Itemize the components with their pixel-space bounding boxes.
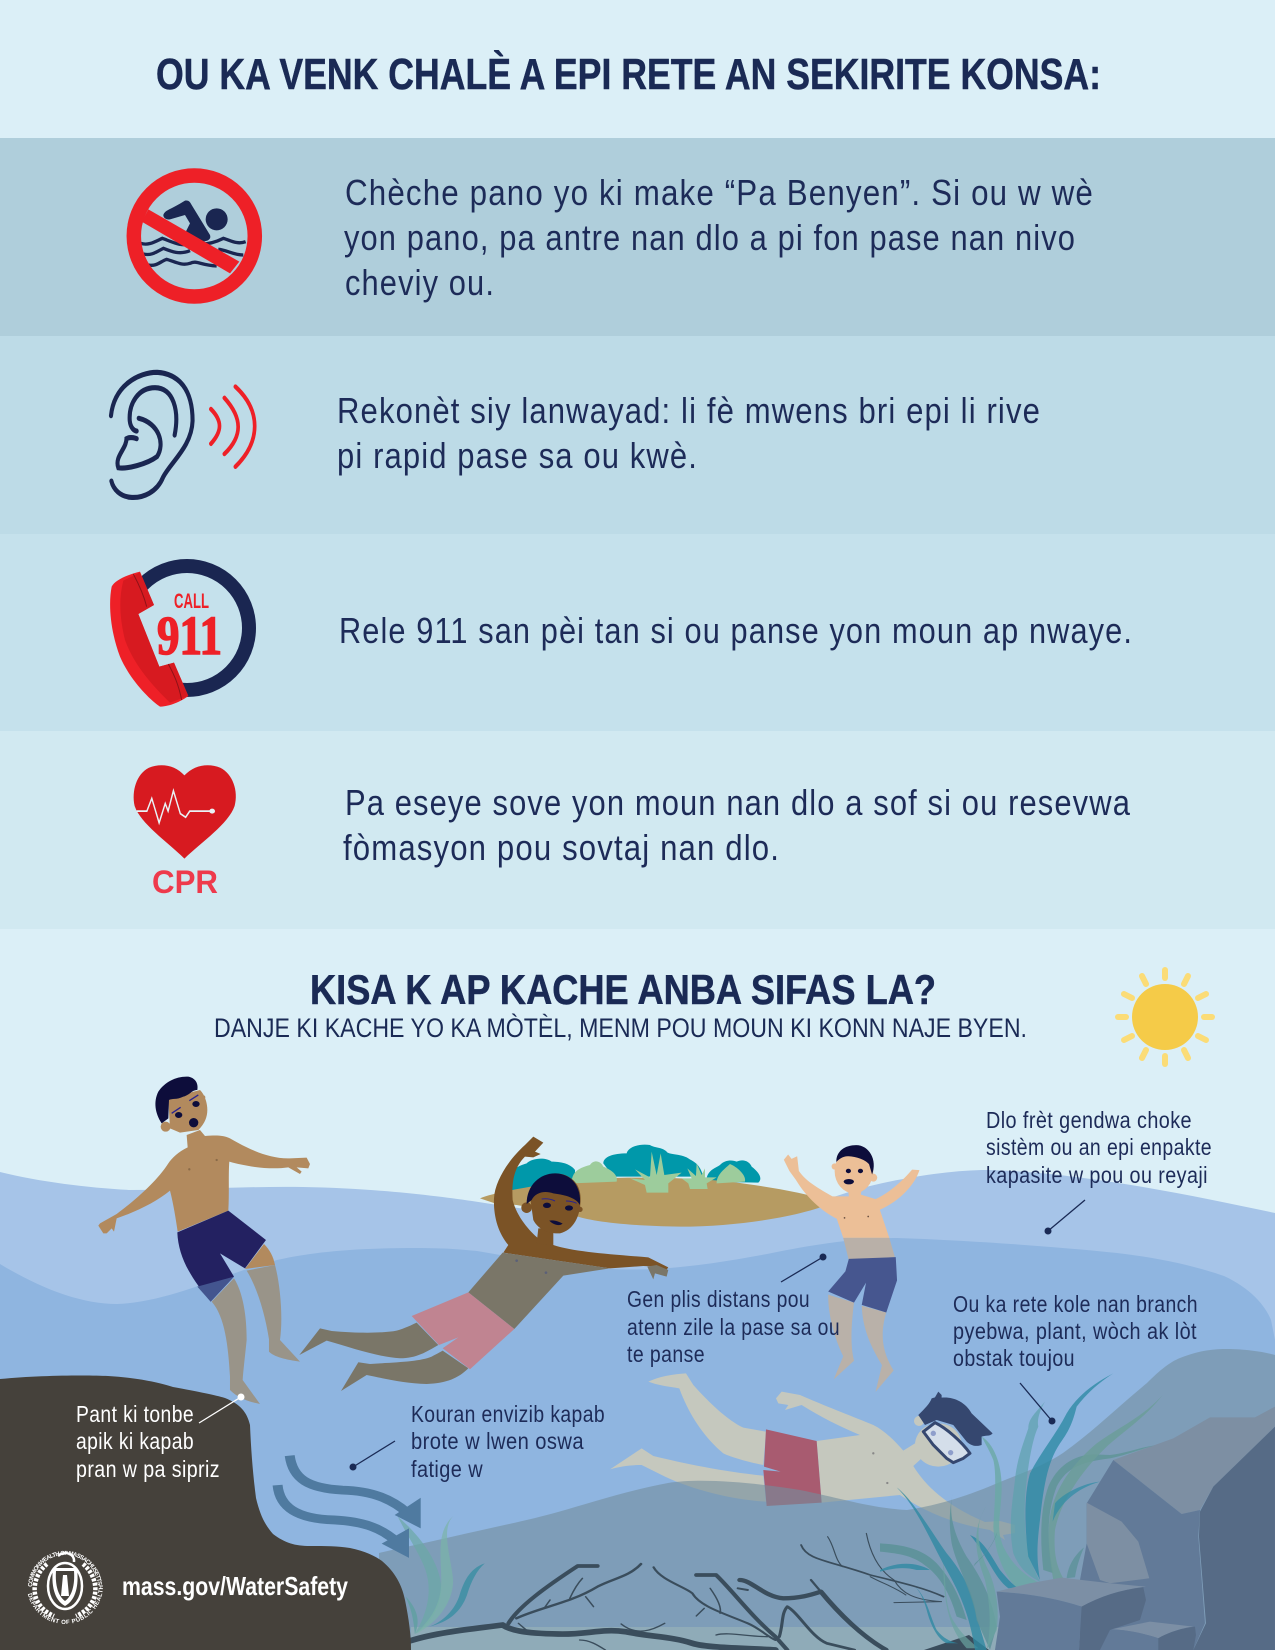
icon: call 911 phone: 911 bbox=[157, 605, 222, 666]
callout: obstacles: obstak toujou bbox=[953, 1345, 1075, 1371]
text: no swimming advice bbox=[344, 172, 1094, 303]
seaweed left bbox=[398, 1514, 485, 1634]
panel: no swimming row bbox=[0, 138, 1275, 336]
website url: mass.gov/WaterSafety bbox=[122, 1571, 348, 1601]
callout: obstacles: Ou ka rete kole nan branch bbox=[953, 1291, 1198, 1317]
logo: department of public health seal: DEPARTMENT OF PUBLIC HEALTH bbox=[28, 1585, 103, 1624]
callout: hidden currents: fatige w bbox=[411, 1456, 483, 1482]
swimmer: boy treading water bbox=[784, 1145, 919, 1392]
text: recognise rip current: pi rapid pase sa ou kwè. bbox=[337, 435, 698, 476]
callout: distance: te panse bbox=[627, 1341, 705, 1367]
icon: ear with sound waves bbox=[111, 372, 255, 497]
callout: distance: atenn zile la pase sa ou bbox=[627, 1314, 840, 1340]
callout: steep drop-off: pran w pa sipriz bbox=[76, 1456, 220, 1482]
shore bank bbox=[0, 1375, 411, 1650]
subheading: DANJE KI KACHE YO KA MÒTÈL, MENM POU MOUN KI KONN NAJE BYEN. bbox=[214, 1012, 1027, 1043]
text: no swimming advice: Chèche pano yo ki make “Pa Benyen”. Si ou w wè bbox=[345, 172, 1094, 213]
logo: department of public health seal: COMMONWEALTH OF MASSACHUSETTS bbox=[28, 1550, 102, 1587]
callout: steep drop-off: apik ki kapab bbox=[76, 1428, 194, 1454]
text: call 911: Rele 911 san pèi tan si ou panse yon moun ap nwaye. bbox=[339, 610, 1133, 651]
seaweed behind rocks bbox=[970, 1373, 1163, 1588]
callout: steep drop-off bbox=[76, 1394, 244, 1482]
callout: steep drop-off: Pant ki tonbe bbox=[76, 1401, 194, 1427]
heading: what lies beneath: KISA K AP KACHE ANBA SIFAS LA? bbox=[310, 966, 936, 1013]
branches bbox=[411, 1533, 943, 1650]
callout: hidden currents: Kouran envizib kapab bbox=[411, 1401, 605, 1427]
icon: sun bbox=[1118, 970, 1212, 1064]
rock: grey ledge bbox=[1113, 1407, 1275, 1514]
callout: hidden currents bbox=[350, 1401, 605, 1482]
rocks bbox=[995, 1427, 1275, 1650]
text: cpr advice: fòmasyon pou sovtaj nan dlo. bbox=[343, 827, 780, 868]
water: near wave bbox=[0, 1238, 1275, 1650]
panel: cpr row bbox=[0, 731, 1275, 929]
island with bushes bbox=[480, 1145, 833, 1227]
logo: department of public health seal bbox=[28, 1550, 103, 1624]
icon: no swimming bbox=[134, 176, 255, 296]
text: cpr advice bbox=[343, 782, 1131, 868]
water: far wave bbox=[0, 1170, 1275, 1650]
callout: cold water bbox=[986, 1107, 1212, 1234]
text: cpr advice: Pa eseye sove yon moun nan dlo a sof si ou resevwa bbox=[345, 782, 1131, 823]
callout: cold water: kapasite w pou ou reyaji bbox=[986, 1162, 1208, 1188]
seabed: sand strip bbox=[411, 1627, 1021, 1650]
callout: cold water: sistèm ou an epi enpakte bbox=[986, 1134, 1212, 1160]
icon: cpr heart bbox=[134, 765, 236, 900]
callout: distance: Gen plis distans pou bbox=[627, 1286, 810, 1312]
text: no swimming advice: cheviy ou. bbox=[345, 262, 495, 303]
swimmer: boy standing left bbox=[98, 1077, 310, 1404]
seaweed foreground bbox=[880, 1487, 998, 1650]
icon: call 911 phone: CALL bbox=[174, 590, 209, 613]
callout: obstacles bbox=[953, 1291, 1198, 1424]
callout: hidden currents: brote w lwen oswa bbox=[411, 1428, 584, 1454]
swimmer: snorkeler bbox=[610, 1373, 1015, 1540]
arrows: rip current bbox=[278, 1456, 421, 1558]
text: recognise rip current: Rekonèt siy lanwayad: li fè mwens bri epi li rive bbox=[337, 390, 1041, 431]
icon: call 911 phone bbox=[110, 566, 249, 707]
text: no swimming advice: yon pano, pa antre nan dlo a pi fon pase nan nivo bbox=[344, 217, 1076, 258]
callout: cold water: Dlo frèt gendwa choke bbox=[986, 1107, 1192, 1133]
icon: cpr heart: CPR bbox=[152, 864, 218, 900]
text: recognise rip current bbox=[337, 390, 1041, 476]
swimmer: boy diving centre bbox=[299, 1137, 668, 1391]
callout: obstacles: pyebwa, plant, wòch ak lòt bbox=[953, 1318, 1197, 1344]
seabed: hill bbox=[379, 1349, 1275, 1650]
panel: call 911 row bbox=[0, 534, 1275, 731]
panel: undertow row bbox=[0, 336, 1275, 534]
callout: distance bbox=[627, 1254, 840, 1367]
dark trunk stump bbox=[924, 1635, 989, 1650]
